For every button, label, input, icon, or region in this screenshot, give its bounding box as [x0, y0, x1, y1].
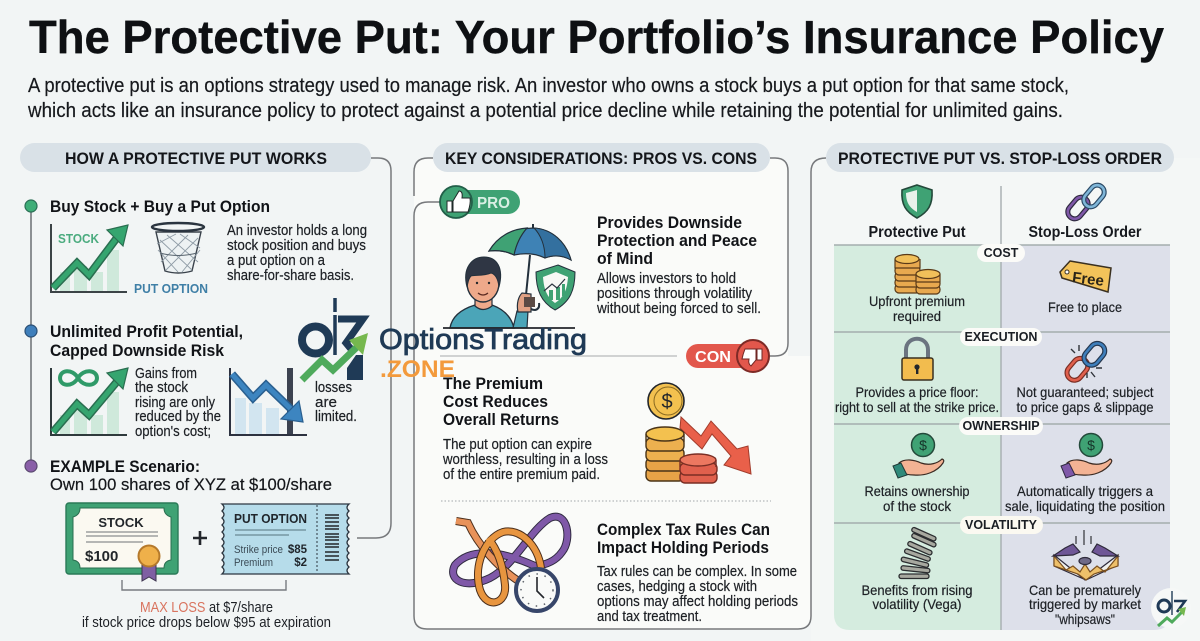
icon: free tag: Free	[1071, 269, 1105, 290]
step 2 heading: Capped Downside Risk	[50, 342, 225, 360]
intro text: A protective put is an options strategy used to manage risk. An investor who owns a stock buys a put option for that same stock,	[28, 74, 1069, 97]
con badge	[686, 340, 769, 372]
pro badge: PRO	[477, 195, 510, 212]
row text: vega: volatility (Vega)	[872, 596, 962, 612]
icon: chain link	[1065, 182, 1107, 222]
gains description	[135, 366, 221, 440]
max loss text	[82, 600, 331, 631]
chart: unlimited profit	[51, 368, 128, 435]
step 1 description: a put option on a	[227, 253, 326, 269]
row text: whipsaws: Can be prematurely	[1029, 582, 1141, 598]
row label: volatility	[960, 516, 1043, 534]
row label: execution: EXECUTION	[965, 330, 1037, 344]
con badge: CON	[695, 349, 731, 366]
gains description: rising are only	[135, 395, 216, 411]
row label: ownership: OWNERSHIP	[962, 419, 1040, 433]
chart: stock rising: STOCK	[58, 231, 100, 246]
losses description	[315, 380, 357, 425]
losses description: are	[315, 395, 337, 411]
example heading: Own 100 shares of XYZ at $100/share	[50, 475, 332, 494]
logo: small badge	[1151, 588, 1191, 628]
icon: hand with coin	[893, 434, 944, 478]
row text: free to place: Free to place	[1048, 299, 1122, 315]
icon: tangled ribbons and clock	[453, 517, 567, 611]
icon: hand with coin: $	[919, 437, 927, 453]
gains description: the stock	[135, 380, 189, 396]
stock certificate	[66, 503, 178, 581]
icon: spring	[899, 527, 937, 578]
row text: upfront premium	[869, 293, 965, 324]
row text: vega	[862, 582, 972, 612]
step 2 heading	[50, 323, 243, 360]
max loss text: if stock price drops below $95 at expiration	[82, 615, 331, 631]
step 1 heading: Buy Stock + Buy a Put Option	[50, 198, 270, 216]
heading: pros cons: KEY CONSIDERATIONS: PROS VS. CONS	[445, 149, 757, 168]
put option ticket: Premium	[234, 557, 273, 569]
max loss text: MAX LOSS at $7/share	[140, 600, 273, 616]
gains description: reduced by the	[135, 409, 221, 425]
row text: whipsaws: "whipsaws"	[1055, 611, 1115, 627]
heading: how it works: HOW A PROTECTIVE PUT WORKS	[65, 149, 327, 168]
pro badge	[440, 186, 520, 218]
row text: price floor: Provides a price floor:	[856, 384, 978, 400]
icon: hand with coin, stop-loss	[1061, 434, 1112, 478]
icon: trap	[1053, 530, 1118, 580]
panel: protective put vs stop-loss	[826, 143, 1174, 630]
comparison table background	[834, 186, 1170, 630]
chart: stock rising	[51, 224, 128, 292]
losses description: losses	[315, 380, 352, 396]
logo: options trading zone: .ZONE	[380, 356, 455, 383]
put option ticket: PUT OPTION	[234, 511, 307, 526]
column headers: Stop-Loss Order	[1028, 224, 1142, 241]
row label: volatility: VOLATILITY	[965, 518, 1038, 532]
row text: not guaranteed	[1016, 384, 1154, 415]
row text: upfront premium: required	[893, 308, 941, 324]
stock certificate: STOCK	[98, 515, 144, 530]
pro text: Allows investors to hold	[597, 271, 736, 287]
con text: premium cost: of the entire premium paid.	[443, 467, 600, 483]
con text: tax rules: options may affect holding periods	[597, 594, 798, 610]
pro text	[596, 214, 761, 317]
icon: padlock	[902, 339, 933, 380]
row text: retains ownership	[864, 483, 970, 514]
step 2 heading: Unlimited Profit Potential,	[50, 323, 243, 341]
pro text: Provides Downside	[597, 214, 742, 232]
bracket	[122, 580, 286, 590]
logo: options trading zone	[302, 298, 587, 383]
panel: pros vs cons	[414, 143, 826, 629]
icon: coins and falling arrow	[646, 383, 751, 483]
icon: free tag	[1060, 261, 1111, 292]
con text: premium cost: The put option can expire	[443, 437, 592, 453]
con text: premium cost	[442, 375, 608, 483]
con text: tax rules: Tax rules can be complex. In some	[597, 564, 797, 580]
step 1 description	[227, 223, 367, 284]
pro text: without being forced to sell.	[596, 301, 761, 317]
con text: tax rules: cases, hedging a stock with	[597, 579, 757, 595]
pro text: Protection and Peace	[597, 232, 757, 250]
con text: tax rules: and tax treatment.	[597, 609, 702, 625]
step marker 1	[25, 200, 37, 212]
row text: whipsaws: triggered by market	[1029, 596, 1141, 612]
row text: not guaranteed: to price gaps & slippage	[1016, 399, 1154, 415]
row text: retains ownership: Retains ownership	[864, 483, 970, 499]
chart: capped downside	[230, 368, 307, 435]
intro text: which acts like an insurance policy to protect against a potential price decline while retaining the potential for unlimited gains.	[27, 99, 1063, 122]
row text: price floor: right to sell at the strike price.	[835, 399, 999, 415]
row text: retains ownership: of the stock	[883, 498, 952, 514]
gains description: option's cost;	[135, 424, 211, 440]
icon: safety net basket: PUT OPTION	[134, 281, 208, 296]
con text: tax rules: Impact Holding Periods	[597, 539, 769, 557]
row text: not guaranteed: Not guaranteed; subject	[1016, 384, 1154, 400]
icon: shield	[902, 185, 932, 218]
pro text: of Mind	[597, 250, 653, 268]
row text: vega: Benefits from rising	[862, 582, 972, 598]
put option ticket: Strike price	[234, 544, 283, 556]
row label: cost	[977, 244, 1025, 262]
icon: coins and falling arrow: $	[661, 391, 673, 413]
stock certificate: $100	[85, 548, 118, 565]
step 1 description: stock position and buys	[227, 238, 366, 254]
icon: safety net basket	[134, 223, 208, 296]
logo: options trading zone: OptionsTrading	[379, 324, 587, 356]
step marker 3	[25, 460, 37, 472]
icon: hand with coin, stop-loss: $	[1087, 437, 1095, 453]
con text: tax rules: Complex Tax Rules Can	[597, 521, 770, 539]
put option ticket: $85	[288, 544, 308, 556]
column headers	[868, 224, 1142, 241]
row label: execution	[960, 328, 1042, 346]
con text: premium cost: Overall Returns	[443, 411, 559, 429]
row text: upfront premium: Upfront premium	[869, 293, 965, 309]
column headers: Protective Put	[868, 224, 966, 241]
con text: premium cost: worthless, resulting in a loss	[442, 452, 608, 468]
step 1 description: share-for-share basis.	[227, 268, 354, 284]
row text: triggers sale: Automatically triggers a	[1017, 483, 1153, 499]
step marker 2	[25, 325, 37, 337]
example heading	[50, 458, 332, 494]
intro text	[27, 74, 1069, 122]
title: The Protective Put: Your Portfolio’s Insurance Policy	[29, 11, 1164, 63]
icon: coins	[895, 254, 940, 294]
pro text: positions through volatility	[597, 286, 753, 302]
heading: comparison: PROTECTIVE PUT VS. STOP-LOSS ORDER	[838, 149, 1162, 168]
gains description: Gains from	[135, 366, 197, 382]
row text: triggers sale	[1005, 483, 1165, 514]
row text: price floor	[835, 384, 999, 415]
example heading: EXAMPLE Scenario:	[50, 458, 200, 476]
con text: premium cost: The Premium	[443, 375, 543, 393]
plus sign	[193, 531, 207, 545]
row label: cost: COST	[984, 246, 1019, 260]
con text: tax rules	[597, 521, 798, 625]
row text: triggers sale: sale, liquidating the position	[1005, 498, 1165, 514]
put option ticket: $2	[294, 557, 307, 569]
step 1 description: An investor holds a long	[227, 223, 367, 239]
con text: premium cost: Cost Reduces	[443, 393, 548, 411]
panel: how a protective put works	[20, 143, 391, 631]
row text: whipsaws	[1029, 582, 1141, 627]
icon: broken chain	[1064, 340, 1108, 383]
losses description: limited.	[315, 409, 357, 425]
illustration: person with umbrella	[443, 224, 575, 328]
put option ticket	[222, 504, 349, 574]
